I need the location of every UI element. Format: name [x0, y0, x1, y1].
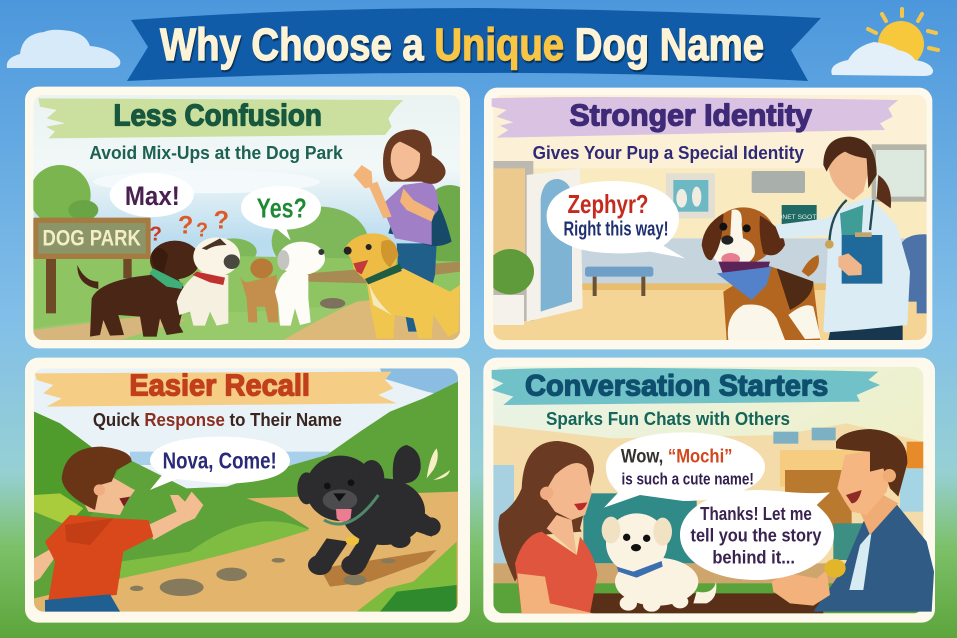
- panel: stronger identity: [484, 88, 932, 349]
- speech bubble: Zephyr: [547, 181, 685, 258]
- speech bubble: Thanks: [680, 490, 834, 580]
- question marks: [149, 206, 229, 245]
- speech bubble: Max: [110, 173, 194, 217]
- speech bubble: Thanks: Thanks! Let me: [700, 503, 812, 524]
- woman in red top: [498, 441, 597, 613]
- icon: cloud left: [7, 30, 120, 68]
- question marks: ?: [214, 206, 229, 234]
- sign: dog park: DOG PARK: [42, 226, 141, 251]
- subheading: Gives Your Pup a Special Identity: [533, 142, 805, 163]
- heading: Conversation Starters: [525, 370, 828, 403]
- speech bubble: Yes: [241, 186, 321, 240]
- speech bubble: Zephyr: Zephyr?: [567, 189, 648, 219]
- icon: sun and cloud: [831, 9, 938, 76]
- subheading: Sparks Fun Chats with Others: [546, 408, 790, 429]
- speech bubble: Zephyr: Right this way!: [563, 219, 668, 241]
- dog: black curly: [297, 445, 441, 575]
- question marks: ?: [149, 222, 162, 245]
- man in blue jacket: [772, 429, 934, 612]
- veterinarian: [775, 137, 910, 340]
- scene: vet clinic: [486, 95, 927, 340]
- panel: less confusion: [25, 87, 480, 348]
- scene: trail: [34, 368, 458, 612]
- dog: chocolate lab: [77, 241, 202, 337]
- speech bubble: Yes: Yes?: [257, 193, 307, 224]
- heading brush: [38, 98, 403, 138]
- subheading: Quick Response to Their Name: [93, 409, 342, 430]
- speech bubble: Mochi: is such a cute name!: [621, 469, 754, 488]
- speech bubble: Thanks: tell you the story: [690, 525, 822, 546]
- dog: beagle with bandana: [702, 207, 821, 340]
- woman with backpack: [353, 129, 452, 332]
- panel: easier recall: [25, 358, 470, 623]
- speech bubble: Max: Max!: [125, 181, 180, 211]
- speech bubble: Mochi: [604, 432, 765, 508]
- panel: conversation starters: [483, 358, 935, 623]
- heading: Less Confusion: [113, 99, 322, 133]
- speech bubble: Nova, come: [150, 437, 290, 490]
- scene: vet clinic: ONET SGOTS: [777, 214, 821, 221]
- dog: small tan: [238, 258, 278, 322]
- sign: dog park: [33, 218, 151, 259]
- title banner: [127, 8, 821, 81]
- speech bubble: Mochi: Wow, “Mochi”: [621, 446, 732, 467]
- dog: white fluffy: [602, 513, 716, 612]
- title text: Why Choose a Unique Dog Name: [160, 19, 764, 70]
- speech bubble: Nova, come: Nova, Come!: [163, 447, 277, 473]
- heading brush: [492, 368, 880, 405]
- speech bubble: Thanks: behind it...: [712, 546, 795, 567]
- heading: Stronger Identity: [569, 99, 812, 133]
- question marks: ?: [196, 220, 208, 242]
- subheading: Avoid Mix-Ups at the Dog Park: [89, 142, 343, 163]
- question marks: ?: [178, 211, 193, 239]
- scene: street: [493, 367, 923, 613]
- heading: Easier Recall: [129, 369, 310, 403]
- dog: golden retriever: [343, 233, 460, 338]
- scene: dog park: [29, 95, 480, 340]
- heading brush: [492, 97, 898, 138]
- dog: white with red collar: [177, 237, 240, 326]
- dog: white puppy: [275, 242, 325, 326]
- boy in red hoodie: [34, 447, 203, 612]
- heading brush: [35, 372, 397, 407]
